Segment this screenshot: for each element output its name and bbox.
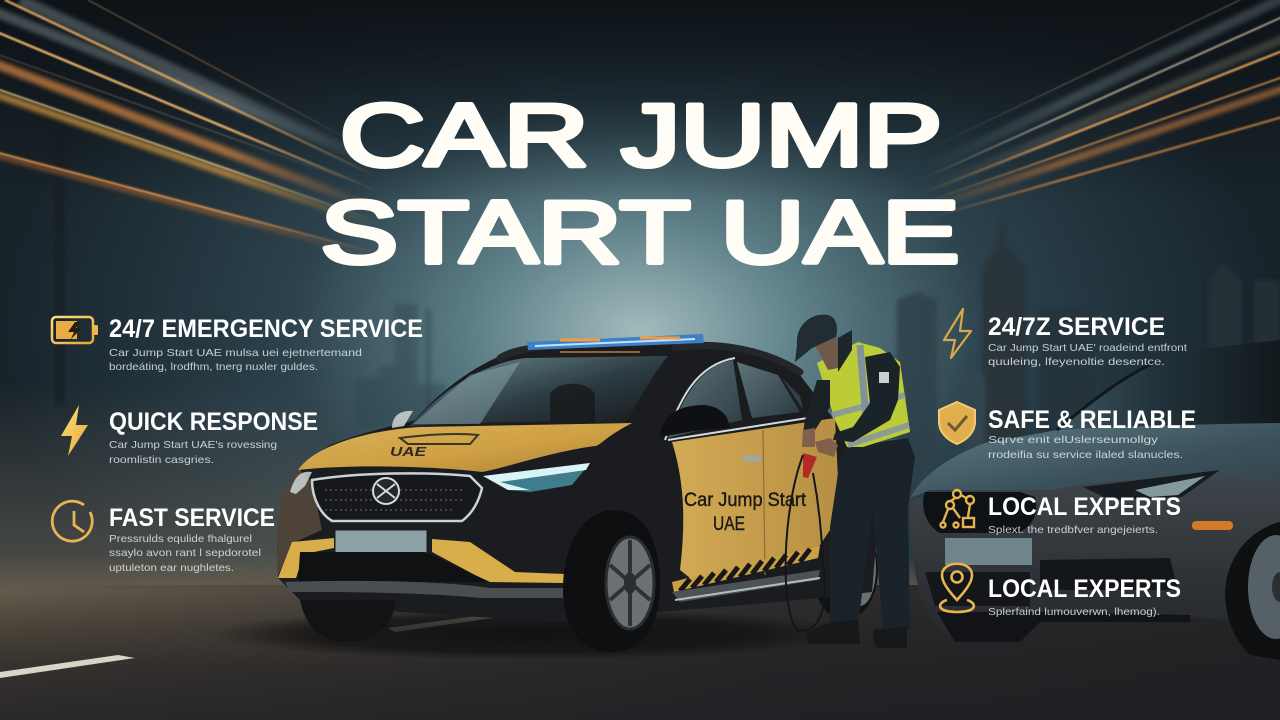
feature: 24/7 emergency service: bordeáting, lrodfhm, tnerg nuxler guldes.	[109, 361, 318, 373]
title	[320, 86, 960, 282]
feature: 24/7 service: Car Jump Start UAE' roadeind entfront	[988, 342, 1187, 354]
feature: fast service: Pressrulds equlide fhalgurel	[109, 533, 252, 545]
feature: 24/7 service	[944, 309, 1187, 368]
technician: hands	[802, 428, 838, 457]
main car: gold door panel with lettering: UAE	[713, 514, 745, 535]
left streetlight silhouette	[55, 135, 64, 405]
feature: local experts location	[940, 564, 1181, 618]
second car: lower body	[910, 470, 1280, 640]
technician: trousers	[830, 438, 915, 630]
main car: front grille and badge	[312, 473, 482, 521]
feature: 24/7 emergency service: Car Jump Start UAE mulsa uei ejetnertemand	[109, 347, 362, 359]
feature: quick response	[61, 405, 318, 466]
second car: number plate	[945, 538, 1032, 565]
second car: hood	[910, 423, 1280, 498]
feature: local experts location: LOCAL EXPERTS	[988, 575, 1181, 603]
feature: safe and reliable	[939, 402, 1196, 461]
icon: route network	[940, 490, 974, 528]
feature: quick response: roomlistin casgries.	[109, 454, 214, 466]
icon: clock	[52, 501, 92, 541]
icon: map pin	[940, 564, 974, 612]
main car: brown front corner	[277, 470, 322, 575]
main car: gold door panel with lettering	[672, 418, 838, 578]
blurred city skyline	[355, 215, 1280, 480]
second car: wheel	[1225, 522, 1280, 660]
icon: shield	[939, 402, 975, 444]
title: CAR JUMP	[340, 86, 942, 184]
feature: quick response: QUICK RESPONSE	[109, 408, 318, 436]
feature: fast service	[52, 501, 275, 574]
main car: windshield	[410, 356, 668, 426]
main car: gold hood	[298, 423, 632, 472]
main car: side mirrors	[392, 405, 729, 437]
title: START UAE	[320, 182, 960, 282]
feature: safe and reliable: SAFE & RELIABLE	[988, 406, 1196, 434]
main car: gold door panel with lettering: Car Jump Start	[684, 490, 807, 511]
technician: boots	[807, 620, 907, 648]
icon: outlined bolt	[944, 309, 971, 358]
main car: number plate	[335, 530, 427, 554]
main car: rear wheel	[812, 520, 878, 620]
technician: collar	[838, 330, 852, 372]
light streaks left	[0, 0, 380, 257]
feature: 24/7 service: 24/7Z SERVICE	[988, 313, 1165, 341]
icon: lightning bolt	[61, 405, 88, 456]
second car: grille	[923, 492, 1036, 533]
main car: body	[277, 341, 878, 622]
feature: fast service: uptuleton ear nughletes.	[109, 562, 234, 574]
second car: amber side marker	[1192, 521, 1233, 530]
main car: lower bumper	[285, 552, 565, 598]
main car: emergency light bar	[527, 334, 704, 352]
second car at right	[910, 340, 1280, 660]
main car: hazard stripe sill	[672, 546, 820, 602]
feature: fast service: ssaylo avon rant l sepdorotel	[109, 547, 261, 559]
feature: local experts route: LOCAL EXPERTS	[988, 493, 1181, 521]
feature: 24/7 emergency service	[52, 315, 423, 373]
technician: cap	[795, 315, 837, 362]
icon: battery	[52, 317, 98, 343]
feature: local experts location: Splerfaind lumouverwn, lhemog).	[988, 606, 1160, 618]
main car: side windows	[665, 358, 820, 440]
main car: roof rail	[500, 344, 800, 372]
feature: safe and reliable: Sqrve enit elUslerseumollgy	[988, 434, 1159, 446]
main car: gold bumper trim	[278, 538, 565, 583]
technician with jump leads	[786, 315, 915, 648]
second car: headlight	[1083, 470, 1220, 500]
feature: 24/7 service: quuleing, lfeyenoltie desentce.	[988, 356, 1165, 368]
technician: right sleeve	[833, 352, 900, 442]
main car: headlights	[290, 463, 590, 494]
ground road	[0, 555, 1280, 720]
feature: 24/7 emergency service: 24/7 EMERGENCY SERVICE	[109, 315, 423, 343]
feature: safe and reliable: rrodeifia su service ilaled slanucles.	[988, 449, 1183, 461]
feature: fast service: FAST SERVICE	[109, 504, 275, 532]
technician: neck and face	[815, 337, 838, 370]
feature: quick response: Car Jump Start UAE's rovessing	[109, 439, 277, 451]
jump lead cable	[786, 455, 825, 631]
main car: front wheels	[300, 510, 660, 652]
light streaks right	[928, 0, 1280, 217]
feature: local experts route: Splext. the tredbfver angejeierts.	[988, 524, 1158, 536]
technician: left sleeve	[803, 380, 830, 433]
technician: hi-vis vest	[817, 342, 910, 447]
second car: windshield	[1055, 340, 1280, 432]
second car: lower air intake	[925, 558, 1178, 606]
feature: local experts route	[940, 490, 1181, 536]
main car: gold hood: UAE	[390, 444, 426, 459]
jump lead clamp	[803, 453, 817, 478]
